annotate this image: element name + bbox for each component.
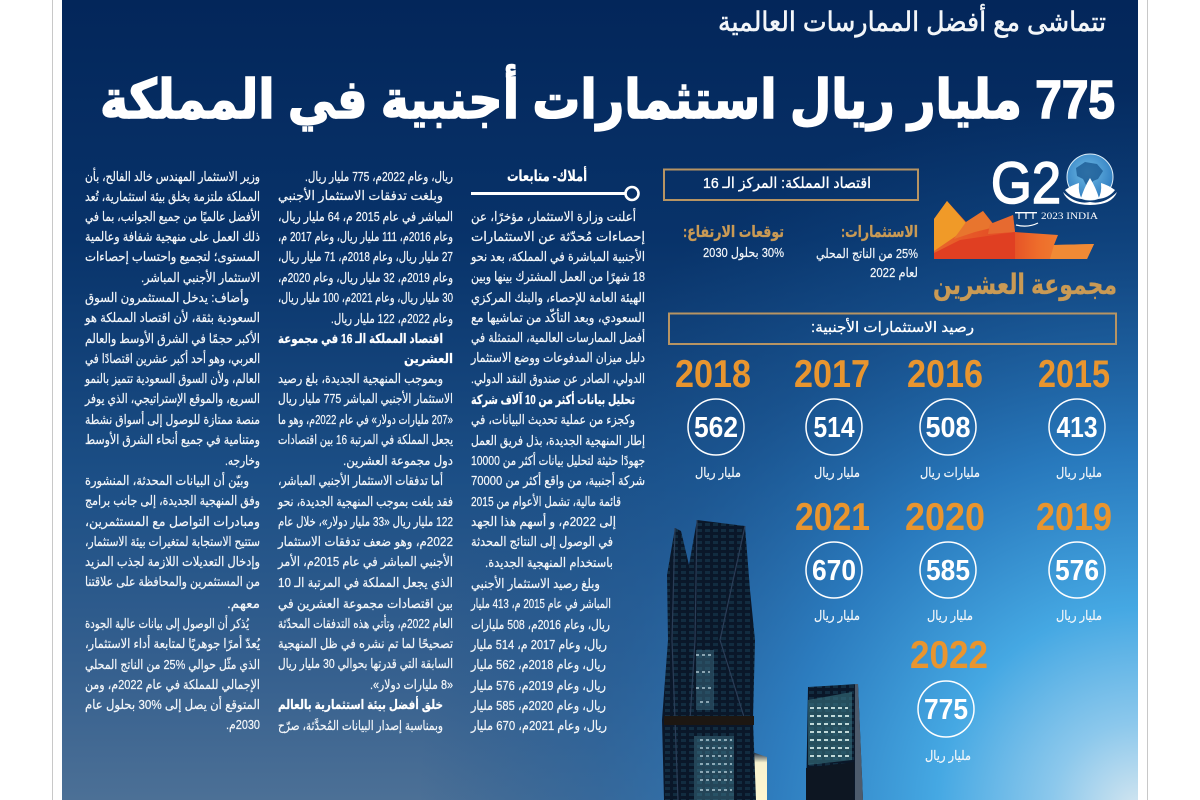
article column: middle: العام 2022م، وتأتي هذه التدفقات المحدّثة (278, 614, 453, 632)
article column: left: ذلك العمل على منهجية شفافة وعالمية (85, 229, 260, 245)
article column: left: المملكة ملتزمة بخلق بيئة استثمارية، تُعد (85, 189, 260, 205)
article column: right: إحصاءات مُحدّثة عن الاستثمارات (471, 229, 645, 245)
stat: 2021: 670 (812, 555, 856, 587)
stat: 2020: مليار ريال (927, 608, 973, 624)
stat: 2021: 2021 (795, 496, 870, 539)
G20 label: مجموعة العشرين (933, 269, 1117, 301)
section tag: أملاك متابعات (471, 166, 638, 200)
article column: right: شركة أجنبية، من واقع أكثر من 70000 (471, 472, 645, 489)
article column: right: 18 شهرًا من العمل المشترك بينها وبين (471, 269, 645, 285)
stat: 2019: 576 (1055, 555, 1099, 587)
article column: right (470, 166, 645, 734)
article column: middle: «207 مليارات دولار» في عام 2022م، وهو ما (278, 412, 453, 428)
illustration: main tower (662, 520, 767, 800)
article column: left: العربي، وهو أحد أكبر عشرين اقتصادًا في (85, 350, 260, 367)
article column: right: ريال، وعام 2020م، 585 مليار (470, 698, 606, 714)
article column: left: وخارجه. (225, 453, 260, 469)
stat: 2016: مليارات ريال (920, 465, 980, 481)
article column: left: السريع، والموقع الإستراتيجي، الذي يوفر (84, 391, 260, 407)
article column: left: منصة ممتازة للوصول إلى أسواق نشطة (85, 411, 260, 428)
logo tagline (1015, 212, 1098, 226)
stat: 2017: 514 (814, 412, 854, 444)
article column: right: أعلنت وزارة الاستثمار، مؤخرًا، عن (471, 208, 636, 225)
article column: middle: وعام 2022م، 122 مليار ريال. (331, 311, 453, 327)
article column: middle: يجعل المملكة في المرتبة 16 بين اقتصادات (278, 432, 453, 448)
article column: middle: وبلغت تدفقات الاستثمار الأجنبي (278, 187, 443, 204)
box: economy rank (664, 170, 918, 200)
section tag: أملاك متابعات: أملاك- متابعات (507, 166, 587, 185)
stat: 2017: 2017 (794, 353, 870, 396)
stat: expected rise (683, 224, 784, 261)
stat: investments: لعام 2022 (870, 265, 918, 280)
article column: left: وزير الاستثمار المهندس خالد الفالح، بأن (85, 167, 260, 185)
G20 logo (934, 151, 1117, 259)
article column: left: وإدخال التعديلات اللازمة لجذب المزيد (85, 554, 260, 570)
box: economy rank: اقتصاد المملكة: المركز الـ 16 (703, 175, 871, 192)
article column: middle: 2022م، وهو ضعف تدفقات الاستثمار (277, 534, 453, 550)
icon: globe with lotus (1063, 154, 1117, 205)
stat: 2022: 775 (924, 694, 968, 726)
stat: 2022: مليار ريال (925, 748, 971, 764)
article column: middle: وبموجب المنهجية الجديدة، بلغ رصيد (278, 371, 443, 387)
stat: 2017: مليار ريال (814, 465, 860, 481)
stat: 2018: 2018 (675, 353, 751, 396)
stat: 2021: مليار ريال (814, 608, 860, 624)
article column: right: ريال، وعام 2017 م، 514 مليار (470, 637, 607, 653)
article column: right: السعودي، وبعد التأكّد من تماشيها مع (471, 308, 645, 326)
article column: right: قائمة مالية، تشمل الأعوام من 2015 (471, 493, 621, 510)
article column: right: الهيئة العامة للإحصاء، والبنك المركزي (471, 290, 645, 306)
article column: middle: الاستثمار الأجنبي المباشر 775 مليار ريال (278, 390, 453, 407)
stat: 2016: 508 (926, 412, 970, 444)
stat: expected rise: توقعات الارتفاع: (683, 224, 784, 241)
stat: 2020: 585 (926, 555, 970, 587)
article column: middle: الأجنبي المباشر في عام 2015م، الأمر (277, 553, 453, 570)
article column: left: ومتنامية في جميع أنحاء الشرق الأوسط (85, 431, 260, 448)
article column: middle: المباشر في عام 2015 م، 64 مليار ريال، (278, 209, 453, 225)
article column: right: الأجنبية المباشرة في المملكة، بعد نحو (470, 248, 645, 265)
stat: 2018: 562 (694, 412, 738, 444)
article column: middle (277, 169, 453, 734)
article column: middle: خلق أفضل بيئة استثمارية بالعالم (278, 696, 443, 712)
box: investment stock heading (669, 314, 1116, 344)
box: investment stock heading: رصيد الاستثمارات الأجنبية: (811, 318, 974, 336)
article column: middle: 122 مليار ريال «33 مليار دولار»، خلال عام (278, 514, 453, 530)
article column: right: إلى 2022م، و أسهم هذا الجهد (471, 513, 616, 530)
article column: right: وكجزء من عملية تحديث البيانات، في (471, 412, 635, 428)
article column: right: الدولي، الصادر عن صندوق النقد الدولي. (471, 371, 645, 387)
article column: middle: 30 مليار ريال، وعام 2021م، 100 مليار ريال، (278, 290, 453, 306)
stat: 2018: مليار ريال (695, 465, 741, 481)
article column: left: المتوقع أن يصل إلى %30 بحلول عام (85, 696, 260, 713)
article column: middle: اقتصاد المملكة الـ 16 في مجموعة (278, 331, 443, 346)
stat: 2019: مليار ريال (1056, 608, 1102, 624)
article column: middle: ريال، وعام 2022م، 775 مليار ريال. (305, 169, 453, 185)
article column: left: وبيّن أن البيانات المحدثة، المنشورة (85, 472, 249, 489)
stat: 2016 (907, 353, 983, 481)
stat: investments: الاستثمارات: (841, 224, 918, 241)
article column: left: الاستثمار الأجنبي المباشر. (141, 269, 260, 286)
article column: middle: وبمناسبة إصدار البيانات المُحدَّثة، صرّح (278, 717, 443, 734)
stat: 2018 (675, 353, 751, 481)
article column: left: السعودية بثقة، لأن اقتصاد المملكة هو (84, 309, 260, 326)
article column: right: المباشر في عام 2015 م، 413 مليار (470, 596, 611, 612)
article column: right: ريال، وعام 2018م، 562 مليار (470, 657, 606, 673)
article column: right: دليل ميزان المدفوعات ووضع الاستثمار (470, 350, 645, 366)
stat: 2022: 2022 (910, 634, 988, 677)
article column: left: وأضاف: يدخل المستثمرون السوق (85, 289, 249, 306)
article column: middle: تصحيحًا لما تم نشره في ظل المنهجية (278, 636, 453, 652)
article column: left: وفق المنهجية الجديدة، إلى جانب برامج (85, 493, 260, 509)
stat: 2017 (794, 353, 870, 481)
logo tagline: 2023 INDIA (1041, 212, 1098, 222)
stat: 2015: 2015 (1038, 353, 1110, 396)
article column: middle: أما تدفقات الاستثمار الأجنبي المباشر، (278, 472, 443, 489)
article column: left: معهم. (227, 596, 260, 612)
article column: left: من المستثمرين والمحافظة على علاقتنا (85, 574, 260, 590)
article column: left: الأفضل عالميًا من جميع الجوانب، بما في (85, 208, 260, 225)
stat: 2019 (1036, 496, 1112, 624)
article column: right: ريال، وعام 2021م، 670 مليار (470, 718, 607, 734)
article column: middle: بين اقتصادات مجموعة العشرين في (278, 596, 453, 612)
article column: left: الإجمالي للمملكة في عام 2022م، ومن (85, 677, 260, 693)
article column: right: تحليل بيانات أكثر من 10 آلاف شركة (471, 391, 635, 407)
article column: middle: فقد بلغت بموجب المنهجية الجديدة، نحو (277, 494, 453, 510)
stat: expected rise: 30% بحلول 2030 (703, 245, 784, 261)
article column: right: في الوصول إلى النتائج المحدثة (471, 534, 613, 550)
article column: left: ستتيح الاستجابة لمتغيرات بيئة الاستثمار، (85, 534, 260, 550)
stat: investments: 25% من الناتج المحلي (816, 246, 918, 262)
article column: middle: وعام 2016م، 111 مليار ريال، وعام 2017 م، (278, 229, 453, 245)
article column: middle: العشرين (404, 351, 453, 366)
icon: orange crown (934, 201, 1094, 259)
stat: 2016: 2016 (907, 353, 983, 396)
article column: left: الأكبر حجمًا في الشرق الأوسط والعالم (85, 330, 260, 347)
article column: right: وبلغ رصيد الاستثمار الأجنبي (471, 575, 600, 592)
stat: 2021 (795, 496, 870, 624)
stat: 2015: مليار ريال (1056, 465, 1102, 481)
article column: middle: 27 مليار ريال، وعام 2018م، 71 مليار ريال، (278, 249, 453, 265)
article column: left: يُعدّ أمرًا جوهريًا لمتابعة أداء الاستثمار، (85, 635, 261, 652)
stat: investments (816, 224, 918, 280)
article column: left: ومبادرات التواصل مع المستثمرين، (85, 514, 260, 530)
article column: left: يُذكر أن الوصول إلى بيانات عالية الجودة (85, 615, 250, 632)
article column: middle: السابقة التي قدرتها بحوالي 30 مليار ريال (278, 656, 453, 672)
G20 logo: G2 (991, 151, 1061, 216)
article column: left: الذي مثّل حوالي %25 من الناتج المحلي (85, 656, 260, 673)
article column: right: إطار المنهجية الجديدة، بذل فريق العمل (471, 433, 645, 449)
article column: right: ريال، وعام 2016م، 508 مليارات (471, 617, 610, 633)
article column: right: ريال، وعام 2019م، 576 مليار (470, 678, 606, 694)
article column: left: المستوى؛ لتجميع واحتساب إحصاءات (85, 249, 260, 265)
stat: 2015: 413 (1056, 412, 1098, 444)
article column: middle: «8 مليارات دولار». (370, 677, 453, 693)
article column: middle: الذي يجعل المملكة في المرتبة الـ 10 (278, 575, 453, 591)
article column: left: 2030م. (226, 717, 260, 732)
stat: 2022 (910, 634, 988, 764)
illustration: second tower (806, 684, 863, 800)
stat: 2020: 2020 (905, 496, 985, 539)
article column: middle: وعام 2019م، 32 مليار ريال، وعام 2020م، (278, 270, 453, 286)
article column: right: باستخدام المنهجية الجديدة. (485, 555, 613, 571)
article column: left (84, 167, 261, 732)
stat: 2019: 2019 (1036, 496, 1112, 539)
subtitle: تتماشى مع أفضل الممارسات العالمية (718, 3, 1106, 38)
article column: right: أفضل الممارسات العالمية، المتمثلة في (471, 329, 645, 346)
article column: right: جهودًا حثيثة لتحليل بيانات أكثر من 10000 (471, 452, 645, 469)
stat: 2020 (905, 496, 985, 624)
stat: 2015 (1038, 353, 1110, 481)
article column: middle: دول مجموعة العشرين. (343, 453, 453, 469)
article column: left: العالم، ولأن السوق السعودية تتميز بالنمو (84, 370, 260, 387)
main title: 775 مليار ريال استثمارات أجنبية في المملكة (100, 64, 1115, 131)
